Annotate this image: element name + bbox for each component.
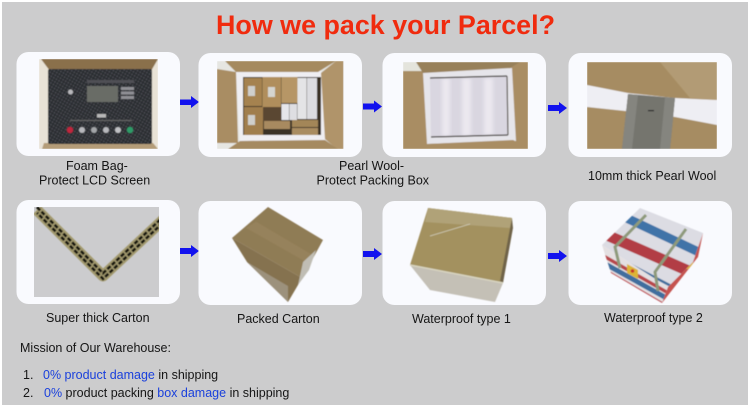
photo: striped woven bag parcel [602,208,704,304]
mission item 2: 0% [44,386,62,400]
caption: pearl wool: Pearl Wool- [339,159,404,173]
caption: packed carton: Packed Carton [237,312,320,326]
caption: pearl wool: Protect Packing Box [316,174,430,188]
arrow 3 [548,102,567,114]
mission item 1: 0% product damage [43,368,155,382]
photo: corrugated cardboard corner [34,207,165,297]
photo: ruler on pearl wool [587,62,717,149]
caption: waterproof type 2: Waterproof type 2 [604,311,703,325]
mission heading: Mission of Our Warehouse: [20,341,171,355]
photo: controller in foam bag [39,59,158,149]
photo: open carton with small boxes [217,61,344,149]
panel: packed carton [198,201,362,305]
caption: foam bag [39,159,150,188]
panel: waterproof type 2 [568,201,732,308]
title: How we pack your Parcel? [216,10,555,40]
arrow 5 [363,248,382,260]
caption: super thick carton: Super thick Carton [46,311,150,325]
photo: sealed brown carton [232,207,323,302]
caption: 10mm thick pearl wool: 10mm thick Pearl Wool [588,169,716,183]
arrow 2 [363,100,382,112]
caption: waterproof type 1: Waterproof type 1 [412,312,511,326]
arrow 1 [180,96,199,108]
panel: foam bag [16,52,180,156]
arrow 6 [548,250,567,262]
mission item 2: product packing box damage in shipping [66,386,289,400]
panel: super thick carton [16,200,180,304]
arrow 4 [180,245,199,257]
caption: pearl wool [316,159,430,188]
panel: foam lined box [382,53,546,157]
panel: 10mm pearl wool [568,53,732,157]
panel: waterproof type 1 [382,201,546,305]
mission item 1: in shipping [155,368,218,382]
photo: carton lined with pearl wool [403,62,528,149]
panel: boxes in pearl wool [198,53,362,157]
caption: foam bag: Protect LCD Screen [39,174,150,188]
photo: film wrapped carton [410,208,513,302]
caption: foam bag: Foam Bag- [66,159,128,173]
mission item 1: 1. [23,368,33,382]
mission item 2: 2. [23,386,33,400]
